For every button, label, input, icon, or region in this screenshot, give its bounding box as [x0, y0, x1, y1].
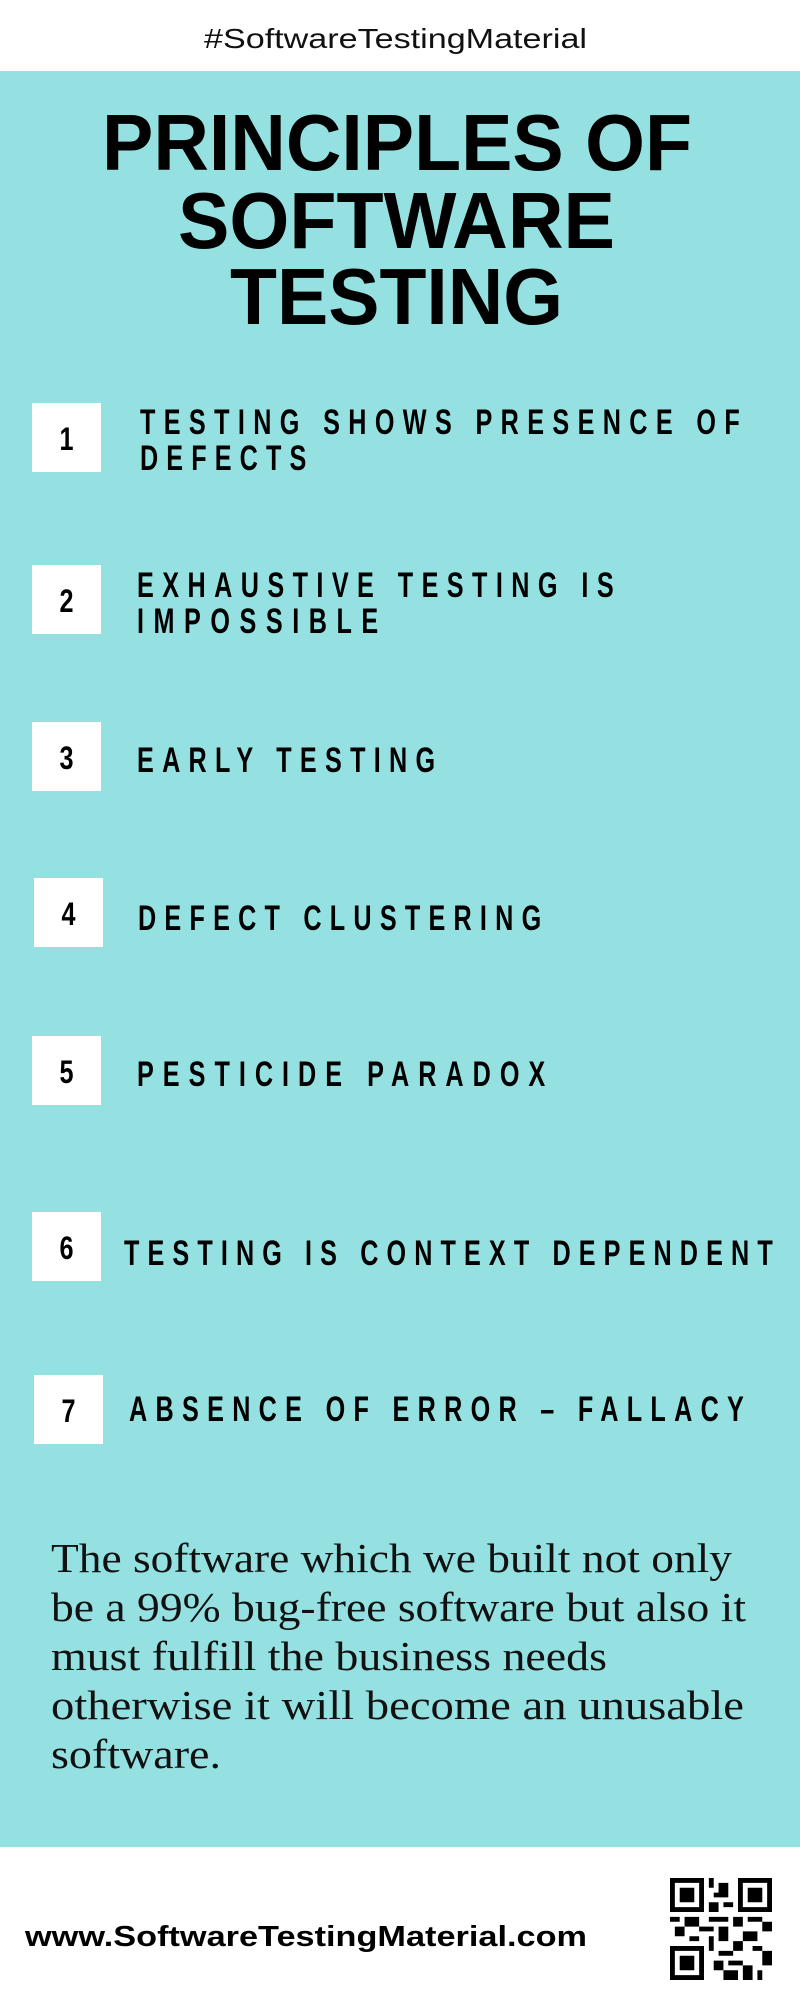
description paragraph: must fulfill the business needs — [51, 1633, 607, 1679]
label 2: IMPOSSIBLE — [137, 602, 378, 641]
number box 1: 1 — [60, 421, 74, 457]
number box 6 — [32, 1212, 101, 1281]
label 1: DEFECTS — [140, 439, 306, 478]
label 6: TESTING IS CONTEXT DEPENDENT — [124, 1234, 773, 1273]
number box 5 — [32, 1036, 101, 1105]
label 5: PESTICIDE PARADOX — [137, 1055, 546, 1094]
description paragraph: The software which we built not only — [51, 1535, 733, 1581]
description paragraph: otherwise it will become an unusable — [51, 1682, 744, 1728]
item 7 — [34, 1375, 744, 1444]
number box 1 — [32, 403, 101, 472]
item 3 — [32, 722, 435, 791]
number box 4: 4 — [62, 896, 76, 932]
header hashtag: #SoftwareTestingMaterial — [204, 23, 587, 54]
label 7: ABSENCE OF ERROR – FALLACY — [129, 1390, 744, 1429]
number box 7: 7 — [62, 1393, 76, 1429]
description paragraph — [51, 1535, 747, 1777]
number box 3 — [32, 722, 101, 791]
number box 5: 5 — [60, 1054, 74, 1090]
item 4 — [34, 878, 541, 947]
number box 4 — [34, 878, 103, 947]
title: PRINCIPLES OF — [102, 98, 692, 187]
item 1 — [32, 403, 740, 478]
title: SOFTWARE — [178, 176, 615, 265]
icon: QR code — [670, 1878, 772, 1980]
description paragraph: be a 99% bug-free software but also it — [51, 1584, 747, 1630]
label 2: EXHAUSTIVE TESTING IS — [137, 566, 614, 605]
number box 7 — [34, 1375, 103, 1444]
item 5 — [32, 1036, 546, 1105]
number box 2 — [32, 565, 101, 634]
title: TESTING — [230, 252, 563, 341]
label 3: EARLY TESTING — [137, 741, 435, 780]
item 6 — [32, 1212, 773, 1281]
footer url: www.SoftwareTestingMaterial.com — [24, 1921, 587, 1953]
description paragraph: software. — [51, 1731, 221, 1777]
number box 6: 6 — [60, 1230, 74, 1266]
label 1: TESTING SHOWS PRESENCE OF — [140, 403, 740, 442]
label 4: DEFECT CLUSTERING — [138, 899, 541, 938]
number box 2: 2 — [60, 583, 74, 619]
number box 3: 3 — [60, 740, 74, 776]
title — [102, 98, 692, 341]
item 2 — [32, 565, 614, 641]
label 1 — [140, 403, 740, 478]
label 2 — [137, 566, 614, 641]
